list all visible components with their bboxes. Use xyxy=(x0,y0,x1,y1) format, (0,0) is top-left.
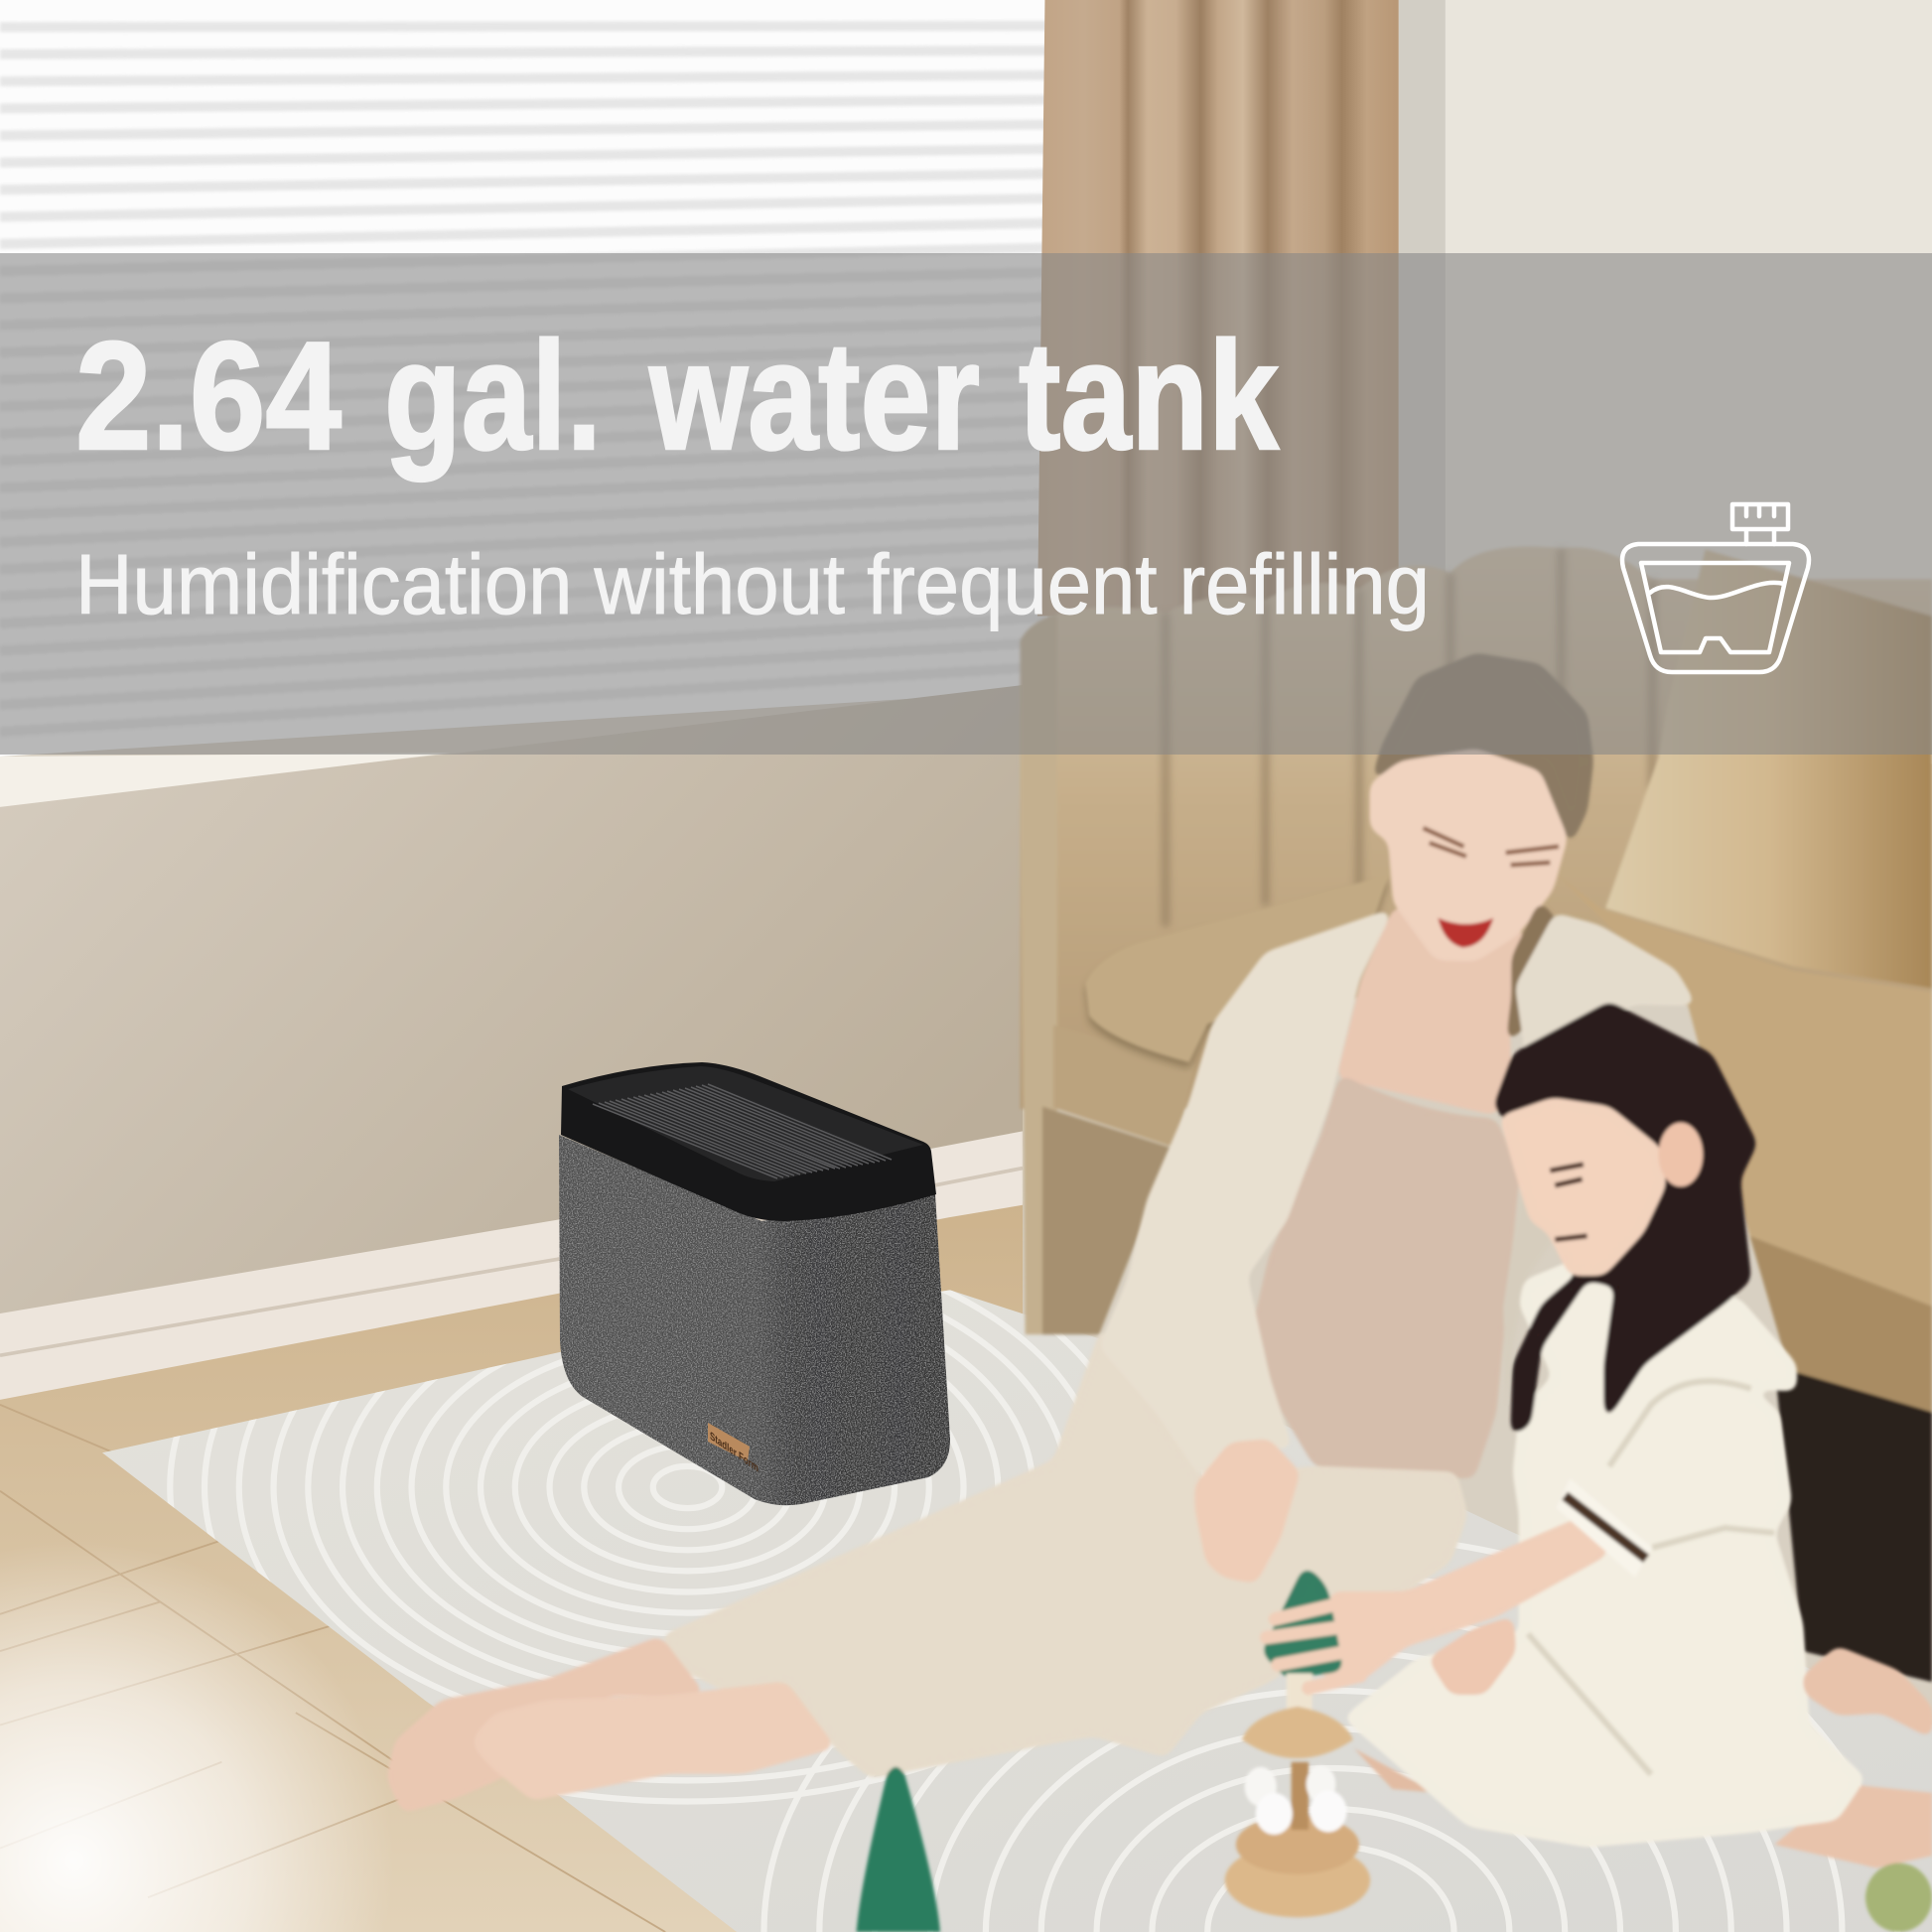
woman foot back xyxy=(387,1636,706,1813)
toy ball xyxy=(1865,1863,1932,1932)
pillow xyxy=(1605,550,1932,988)
window blinds xyxy=(0,0,1047,757)
girl dress shading xyxy=(1528,1381,1774,1774)
area rug xyxy=(102,1290,1932,1932)
woman top xyxy=(1247,1074,1519,1478)
girl fingers xyxy=(1267,1604,1360,1688)
woman pants xyxy=(660,1324,1467,1778)
baseboard xyxy=(0,1131,1023,1400)
girl ear xyxy=(1659,1123,1703,1186)
tank outer shell xyxy=(1622,544,1809,672)
woman lips xyxy=(1438,918,1493,947)
woman cardigan strip xyxy=(1503,1182,1559,1405)
tank inner xyxy=(1641,563,1789,652)
sofa back xyxy=(1021,547,1932,1109)
toy cone xyxy=(857,1767,940,1932)
woman foot front xyxy=(475,1682,835,1800)
woman braid xyxy=(1506,899,1568,1046)
girl hand right xyxy=(1803,1646,1932,1738)
woman brows and eyes xyxy=(1423,828,1559,865)
girl arm xyxy=(1318,1514,1609,1682)
humidifier top plate xyxy=(568,1066,923,1181)
woman face xyxy=(1370,750,1568,961)
subtitle: Humidification without frequent refilling xyxy=(75,538,1430,632)
sofa seat cushion left xyxy=(1085,875,1389,1062)
heading band xyxy=(0,253,1932,755)
woman hair xyxy=(1370,653,1593,847)
woman chest xyxy=(1337,908,1528,1115)
girl sleeve stripe xyxy=(1565,1496,1646,1559)
woman cardigan right xyxy=(1516,913,1697,1072)
girl dress xyxy=(1343,1259,1865,1847)
floor xyxy=(0,1201,1023,1932)
toy tree small xyxy=(1262,1568,1343,1711)
girl face xyxy=(1499,1098,1666,1276)
water wave xyxy=(1650,583,1784,598)
woman cardigan left xyxy=(1099,908,1394,1478)
tank cap xyxy=(1732,504,1788,544)
girl foot xyxy=(1774,1784,1932,1868)
sofa channel seams xyxy=(1166,548,1652,926)
girl hair xyxy=(1493,1002,1757,1437)
brand text: Stadler Form xyxy=(710,1430,759,1475)
woman hand xyxy=(1195,1440,1300,1584)
window sill xyxy=(0,753,450,807)
sofa front right xyxy=(1749,1236,1932,1412)
girl back leg xyxy=(1354,1748,1436,1793)
sofa under shadow xyxy=(1774,1361,1932,1682)
sofa seat cushion shadow xyxy=(1085,881,1389,1068)
brand tag xyxy=(708,1423,759,1475)
title: 2.64 xyxy=(75,310,342,482)
sofa seat right xyxy=(1555,873,1932,1307)
title xyxy=(75,310,1280,482)
curtain xyxy=(1037,0,1399,617)
sofa rail xyxy=(1053,1026,1195,1149)
toy music box xyxy=(1225,1707,1370,1917)
sofa arm strip xyxy=(1021,614,1057,1334)
right wall xyxy=(1399,0,1932,763)
icon: water tank xyxy=(1622,504,1809,672)
people and toys xyxy=(387,653,1932,1932)
product: humidifier xyxy=(559,1062,950,1505)
woman xyxy=(387,653,1697,1813)
girl eye and mouth xyxy=(1550,1165,1587,1240)
title: water xyxy=(648,310,980,482)
sofa xyxy=(1021,547,1932,1682)
humidifier grille xyxy=(593,1084,892,1178)
girl sleeve cuff xyxy=(1557,1478,1652,1578)
title: tank xyxy=(1019,310,1280,482)
wall xyxy=(0,685,1023,1330)
girl xyxy=(1262,1002,1932,1868)
humidifier black rim xyxy=(561,1062,936,1221)
humidifier body xyxy=(559,1135,950,1505)
title: gal. xyxy=(384,310,602,482)
sofa lower base xyxy=(1042,1107,1173,1334)
girl hand left xyxy=(1428,1616,1516,1695)
